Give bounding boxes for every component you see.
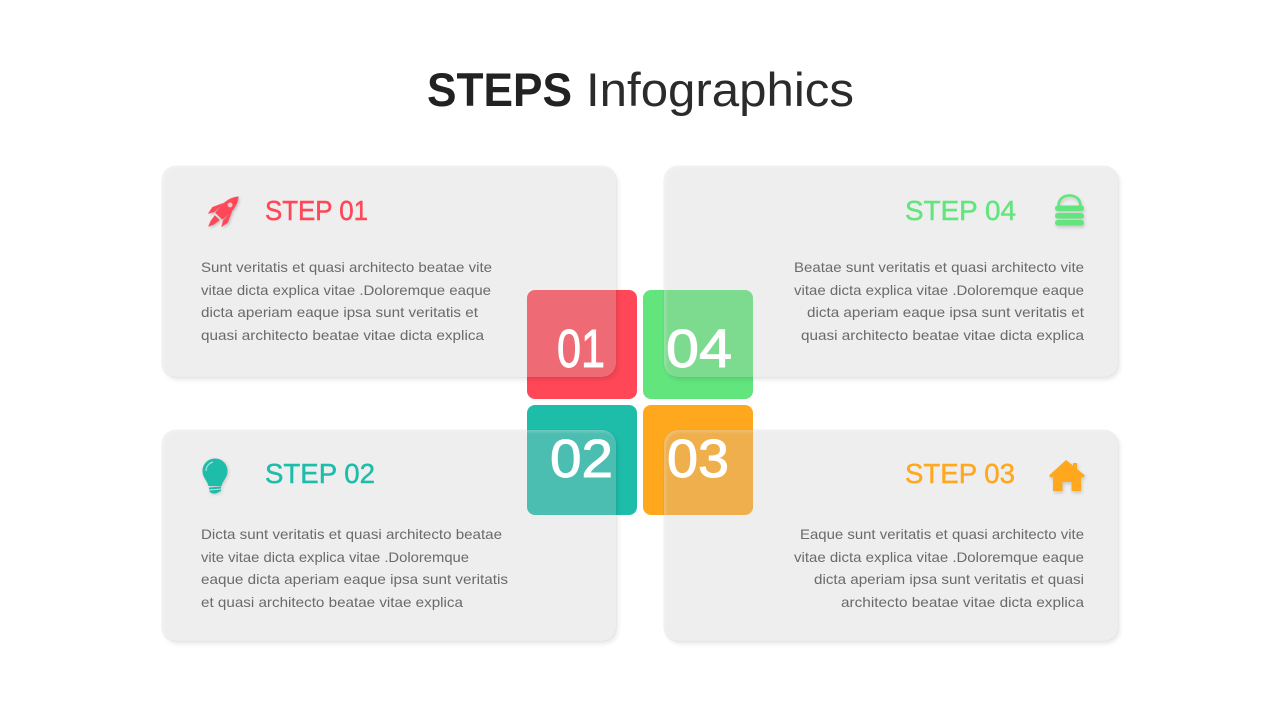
- text: step 03 body: architecto beatae vitae dicta explica: [841, 595, 1084, 610]
- square 04 background: [643, 290, 753, 399]
- text: step 03 body: dicta aperiam ipsa sunt veritatis et quasi: [814, 572, 1084, 587]
- text: step 02 body: [201, 527, 508, 610]
- square 01 background: [527, 290, 637, 399]
- text: step 04 body: quasi architecto beatae vitae dicta explica: [801, 328, 1084, 343]
- text: step 03 body: Eaque sunt veritatis et quasi architecto vite: [800, 527, 1084, 542]
- title: [427, 63, 854, 116]
- panel: step 03: [664, 430, 1118, 641]
- icon: rocket: [200, 189, 246, 235]
- title: STEPS: [427, 63, 572, 116]
- text: step 01 body: quasi architecto beatae vitae dicta explica: [201, 328, 484, 343]
- number 01: 01: [557, 319, 605, 379]
- text: step 01 body: dicta aperiam eaque ipsa sunt veritatis et: [201, 305, 478, 320]
- panel: step 04: [664, 166, 1118, 377]
- icon: house: [1049, 460, 1085, 491]
- text: step 01 body: vitae dicta explica vitae .Doloremque eaque: [201, 283, 491, 298]
- icon: lock: [1055, 196, 1084, 226]
- icon: light bulb: [202, 458, 228, 494]
- text: step 02 body: eaque dicta aperiam eaque ipsa sunt veritatis: [201, 572, 508, 587]
- text: step 02 body: vite vitae dicta explica vitae .Doloremque: [201, 550, 469, 565]
- text: step 03 body: [794, 527, 1084, 610]
- text: step 02 body: Dicta sunt veritatis et quasi architecto beatae: [201, 527, 502, 542]
- heading: step 01: STEP 01: [265, 195, 368, 226]
- number 03: 03: [667, 429, 729, 489]
- text: step 04 body: Beatae sunt veritatis et quasi architecto vite: [794, 260, 1084, 275]
- text: step 01 body: [201, 260, 492, 343]
- text: step 04 body: dicta aperiam eaque ipsa sunt veritatis et: [807, 305, 1084, 320]
- square 03 background: [643, 405, 753, 515]
- panel: step 01: [162, 166, 616, 377]
- number 02: 02: [550, 429, 613, 489]
- text: step 02 body: et quasi architecto beatae vitae explica: [201, 595, 463, 610]
- text: step 04 body: [794, 260, 1084, 343]
- square 02 background: [527, 405, 637, 515]
- title: Infographics: [586, 63, 854, 116]
- heading: step 02: STEP 02: [265, 458, 375, 489]
- heading: step 04: STEP 04: [905, 195, 1016, 226]
- panel: step 02: [162, 430, 616, 641]
- heading: step 03: STEP 03: [905, 458, 1015, 489]
- text: step 03 body: vitae dicta explica vitae .Doloremque eaque: [794, 550, 1084, 565]
- text: step 01 body: Sunt veritatis et quasi architecto beatae vite: [201, 260, 492, 275]
- text: step 04 body: vitae dicta explica vitae .Doloremque eaque: [794, 283, 1084, 298]
- number 04: 04: [666, 319, 732, 379]
